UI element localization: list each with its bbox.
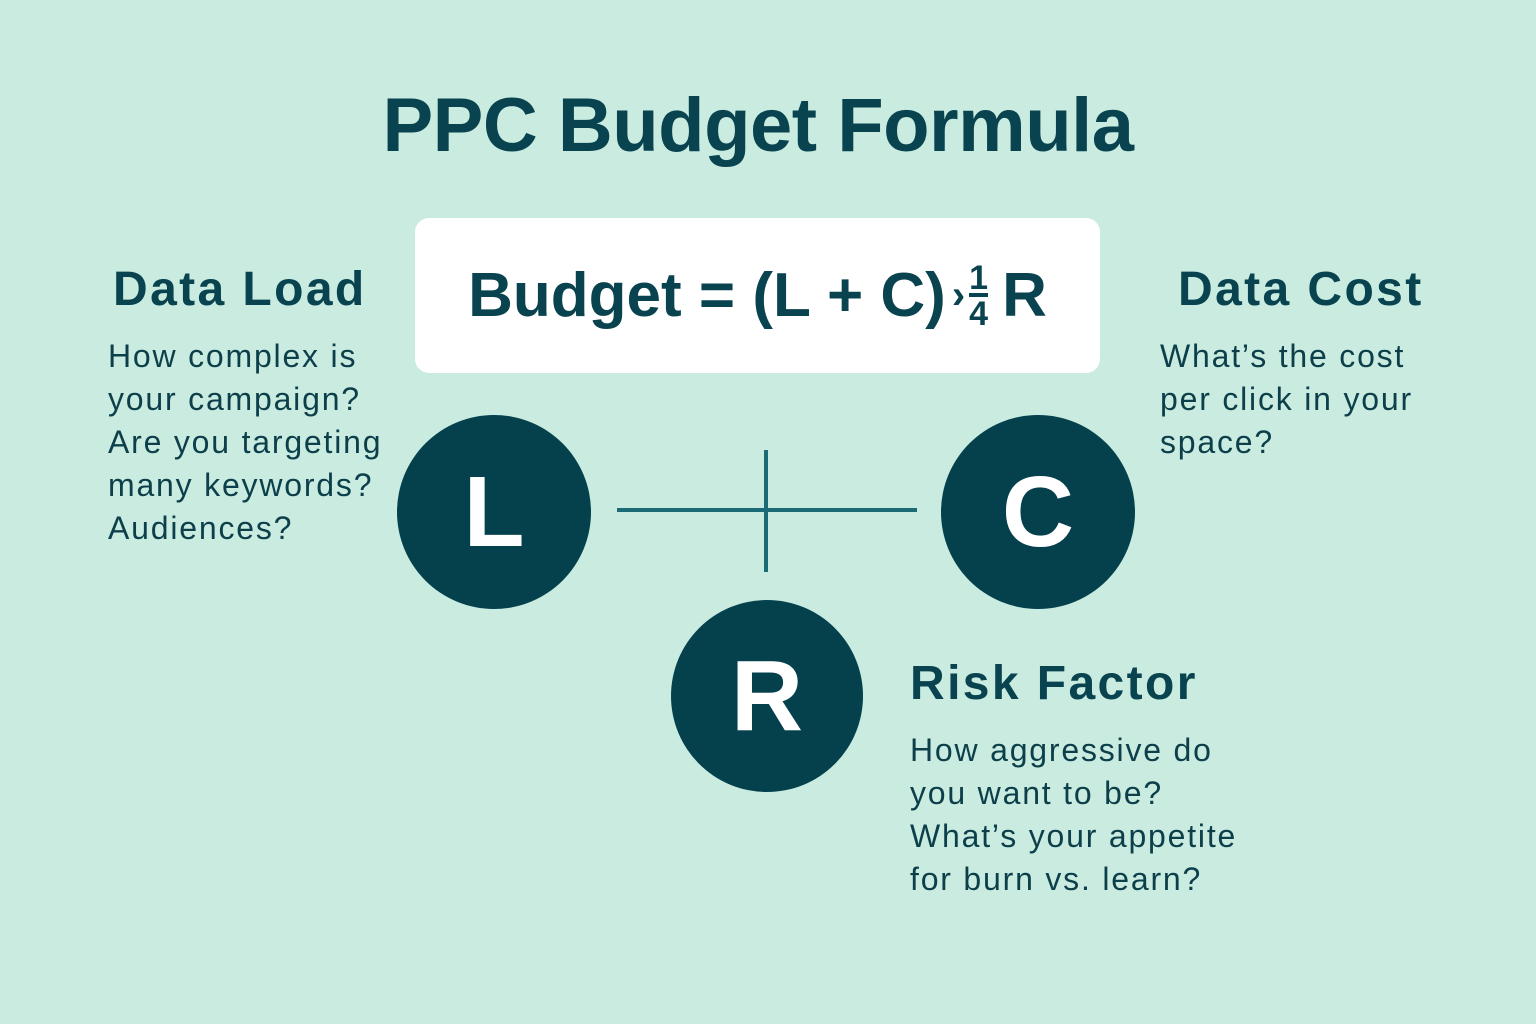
text: risk factor [910,732,1237,897]
circle C [941,415,1135,609]
text: data load [108,338,382,546]
text: data cost: What’s the cost [1160,338,1405,374]
panel: data cost [1160,263,1424,460]
text: data load: How complex is [108,338,357,374]
text: data load: your campaign? [108,381,361,417]
title: PPC Budget Formula [382,83,1134,168]
heading: data load: Data Load [113,263,367,316]
circle L [397,415,591,609]
heading: risk factor: Risk Factor [910,657,1198,710]
text: risk factor: How aggressive do [910,732,1213,768]
circle L: L [463,456,525,568]
text: risk factor: for burn vs. learn? [910,861,1202,897]
panel: data load [108,263,382,546]
formula box: › [952,273,965,317]
formula box: 1 [969,258,988,296]
text: data load: Audiences? [108,510,293,546]
formula box [415,218,1100,373]
text: data cost: per click in your [1160,381,1413,417]
heading: data cost: Data Cost [1178,263,1424,316]
text: risk factor: you want to be? [910,775,1163,811]
text: data cost [1160,338,1413,460]
formula box: Budget = (L + C) R [468,261,1047,330]
text: risk factor: What’s your appetite [910,818,1237,854]
text: data load: Are you targeting [108,424,382,460]
text: data cost: space? [1160,424,1274,460]
circle R [671,600,863,792]
circle C: C [1002,456,1074,568]
formula box: 4 [969,294,988,332]
circle R: R [731,640,803,752]
panel: risk factor [910,657,1237,897]
text: data load: many keywords? [108,467,373,503]
